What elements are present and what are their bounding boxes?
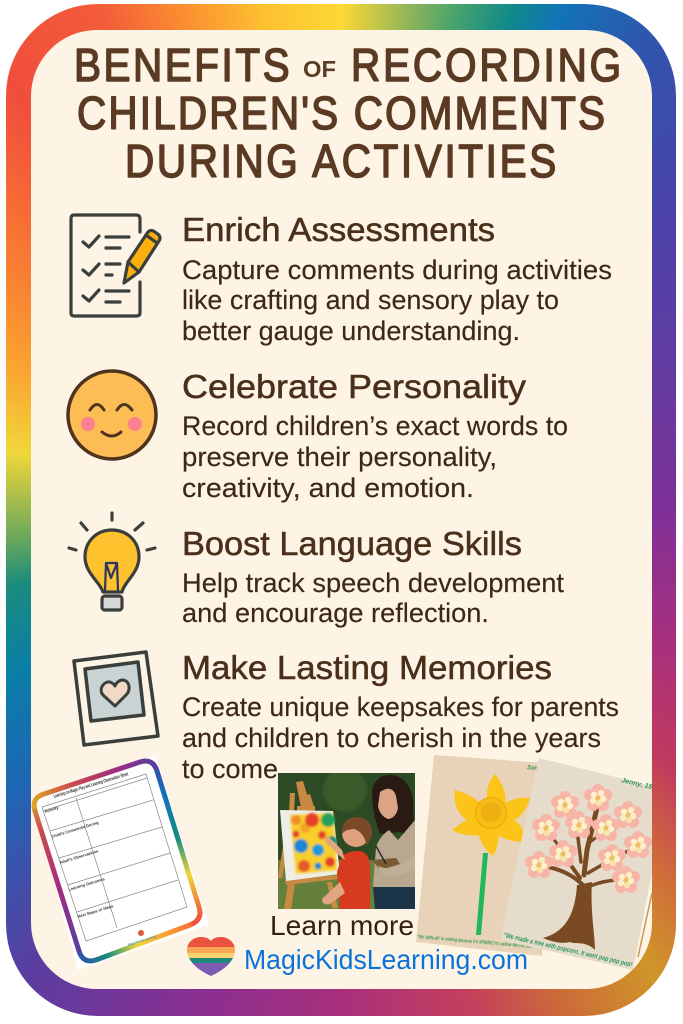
worksheet row labels: Learning Outcomes — [68, 876, 106, 892]
craft card: daffodil — [416, 755, 547, 956]
icon: framed heart photo — [74, 652, 158, 745]
title — [74, 41, 621, 188]
tree trunk and branches — [543, 808, 630, 950]
text: boost language skills body — [182, 568, 564, 628]
icon: rainbow heart — [187, 937, 235, 976]
easel — [278, 781, 339, 909]
title: CHILDREN'S COMMENTS — [77, 89, 605, 140]
photo: child painting with adult — [278, 768, 415, 909]
boy — [322, 817, 372, 909]
worksheet mini heart: MagicKidsLearning — [127, 934, 157, 947]
text: celebrate personality body: Record children’s exact words to — [182, 411, 568, 441]
worksheet row labels — [44, 805, 115, 919]
text: enrich assessments body — [182, 255, 612, 346]
daffodil flower — [452, 774, 530, 856]
worksheet title text: Learning on Magic Play and Learning Observation Sheet — [53, 771, 129, 800]
heading: boost language skills: Boost Language Skills — [182, 525, 522, 562]
text: celebrate personality body: creativity, and emotion. — [182, 473, 474, 503]
worksheet thumbnail — [32, 755, 209, 970]
text: celebrate personality body — [182, 411, 568, 503]
tree date: Jenny, 15/03 — [621, 777, 663, 793]
heading: enrich assessments: Enrich Assessments — [182, 211, 495, 248]
worksheet row labels: Activity — [44, 805, 60, 814]
text: boost language skills body: Help track speech development — [182, 568, 564, 598]
title: OF — [303, 56, 336, 82]
daffodil caption: "My 'daffy-dil' is smiling because it's SPRING! It's yellow like the sun!" — [417, 934, 535, 950]
daffodil date: Sam, 1 — [527, 765, 547, 773]
icon: smiling face — [68, 371, 156, 459]
text: make lasting memories body: to come — [182, 754, 278, 784]
text: boost language skills body: and encourage reflection. — [182, 598, 489, 628]
worksheet row labels: Adult's Observations — [59, 848, 99, 865]
text: enrich assessments body: better gauge understanding. — [182, 316, 520, 346]
icon: checklist with pencil — [71, 215, 160, 316]
website link: MagicKidsLearning.com — [244, 944, 528, 975]
painting — [280, 810, 340, 881]
woman — [372, 775, 415, 909]
daffodil stem — [476, 853, 488, 935]
text: make lasting memories body — [182, 692, 619, 784]
text: make lasting memories body: and children to cherish in the years — [182, 723, 601, 753]
icon: light bulb — [69, 513, 155, 610]
tree caption: "We made a tree with popcorn. It went pop pop pop! — [503, 932, 633, 969]
title: DURING ACTIVITIES — [125, 137, 556, 188]
worksheet row labels: Next Steps or Ideas — [77, 903, 115, 919]
heading: celebrate personality: Celebrate Personality — [182, 368, 527, 405]
heading: make lasting memories: Make Lasting Memories — [182, 649, 552, 686]
text: celebrate personality body: preserve their personality, — [182, 442, 497, 472]
tree blossoms — [525, 784, 652, 893]
text: enrich assessments body: like crafting and sensory play to — [182, 285, 559, 315]
learn more label: Learn more — [270, 910, 414, 941]
text: enrich assessments body: Capture comments during activities — [182, 255, 612, 285]
text: make lasting memories body: Create unique keepsakes for parents — [182, 692, 619, 722]
craft card: popcorn tree — [500, 758, 668, 970]
title: BENEFITS — [74, 41, 290, 92]
worksheet row labels: Child's Comments During — [51, 820, 100, 839]
title: RECORDING — [351, 41, 621, 92]
